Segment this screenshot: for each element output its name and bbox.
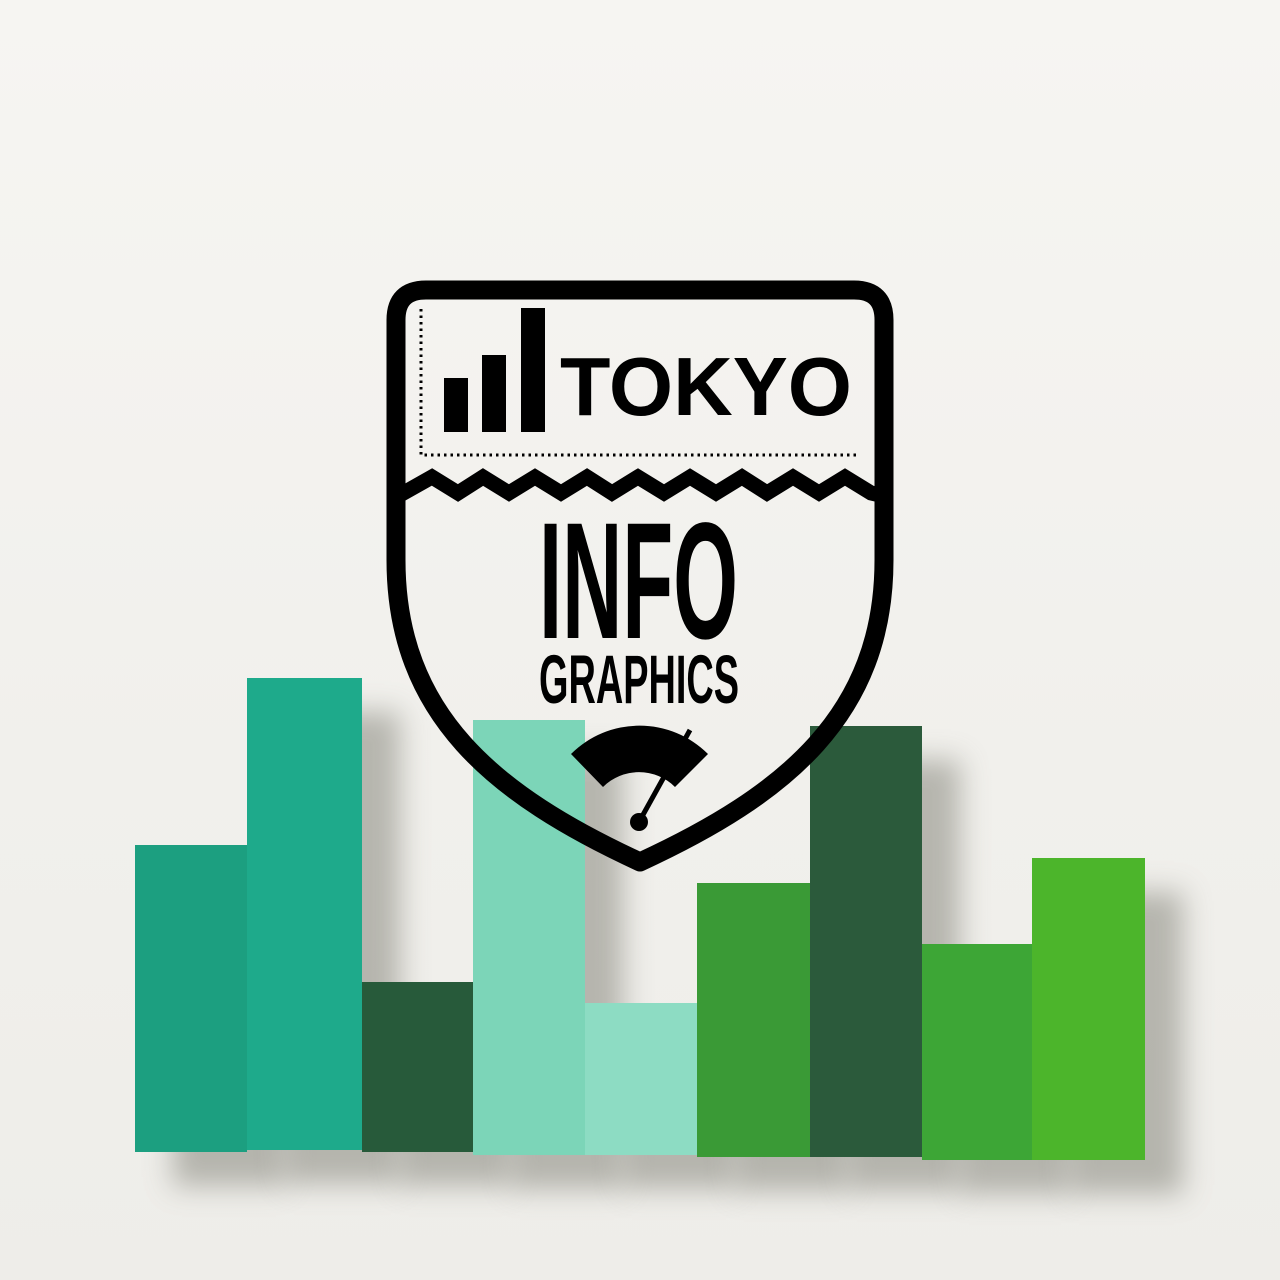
icon: bar chart xyxy=(444,308,545,432)
TOKYO text: TOKYO xyxy=(560,340,852,433)
block 6 xyxy=(697,883,810,1157)
block 7 xyxy=(810,726,922,1157)
block 5 xyxy=(585,1003,697,1155)
INFO text: INFO xyxy=(539,489,738,674)
GRAPHICS text: GRAPHICS xyxy=(539,641,739,718)
dotted frame xyxy=(421,309,860,455)
block 2 xyxy=(247,678,362,1150)
icon: gauge xyxy=(571,726,708,831)
bar chart: wooden blocks xyxy=(135,678,1198,1211)
block 8 xyxy=(922,944,1032,1160)
shield outline xyxy=(396,290,884,862)
zigzag band xyxy=(400,477,880,495)
block 9 xyxy=(1032,858,1145,1160)
block 4 xyxy=(473,720,585,1155)
block 3 xyxy=(362,982,473,1152)
block 1 xyxy=(135,845,247,1152)
